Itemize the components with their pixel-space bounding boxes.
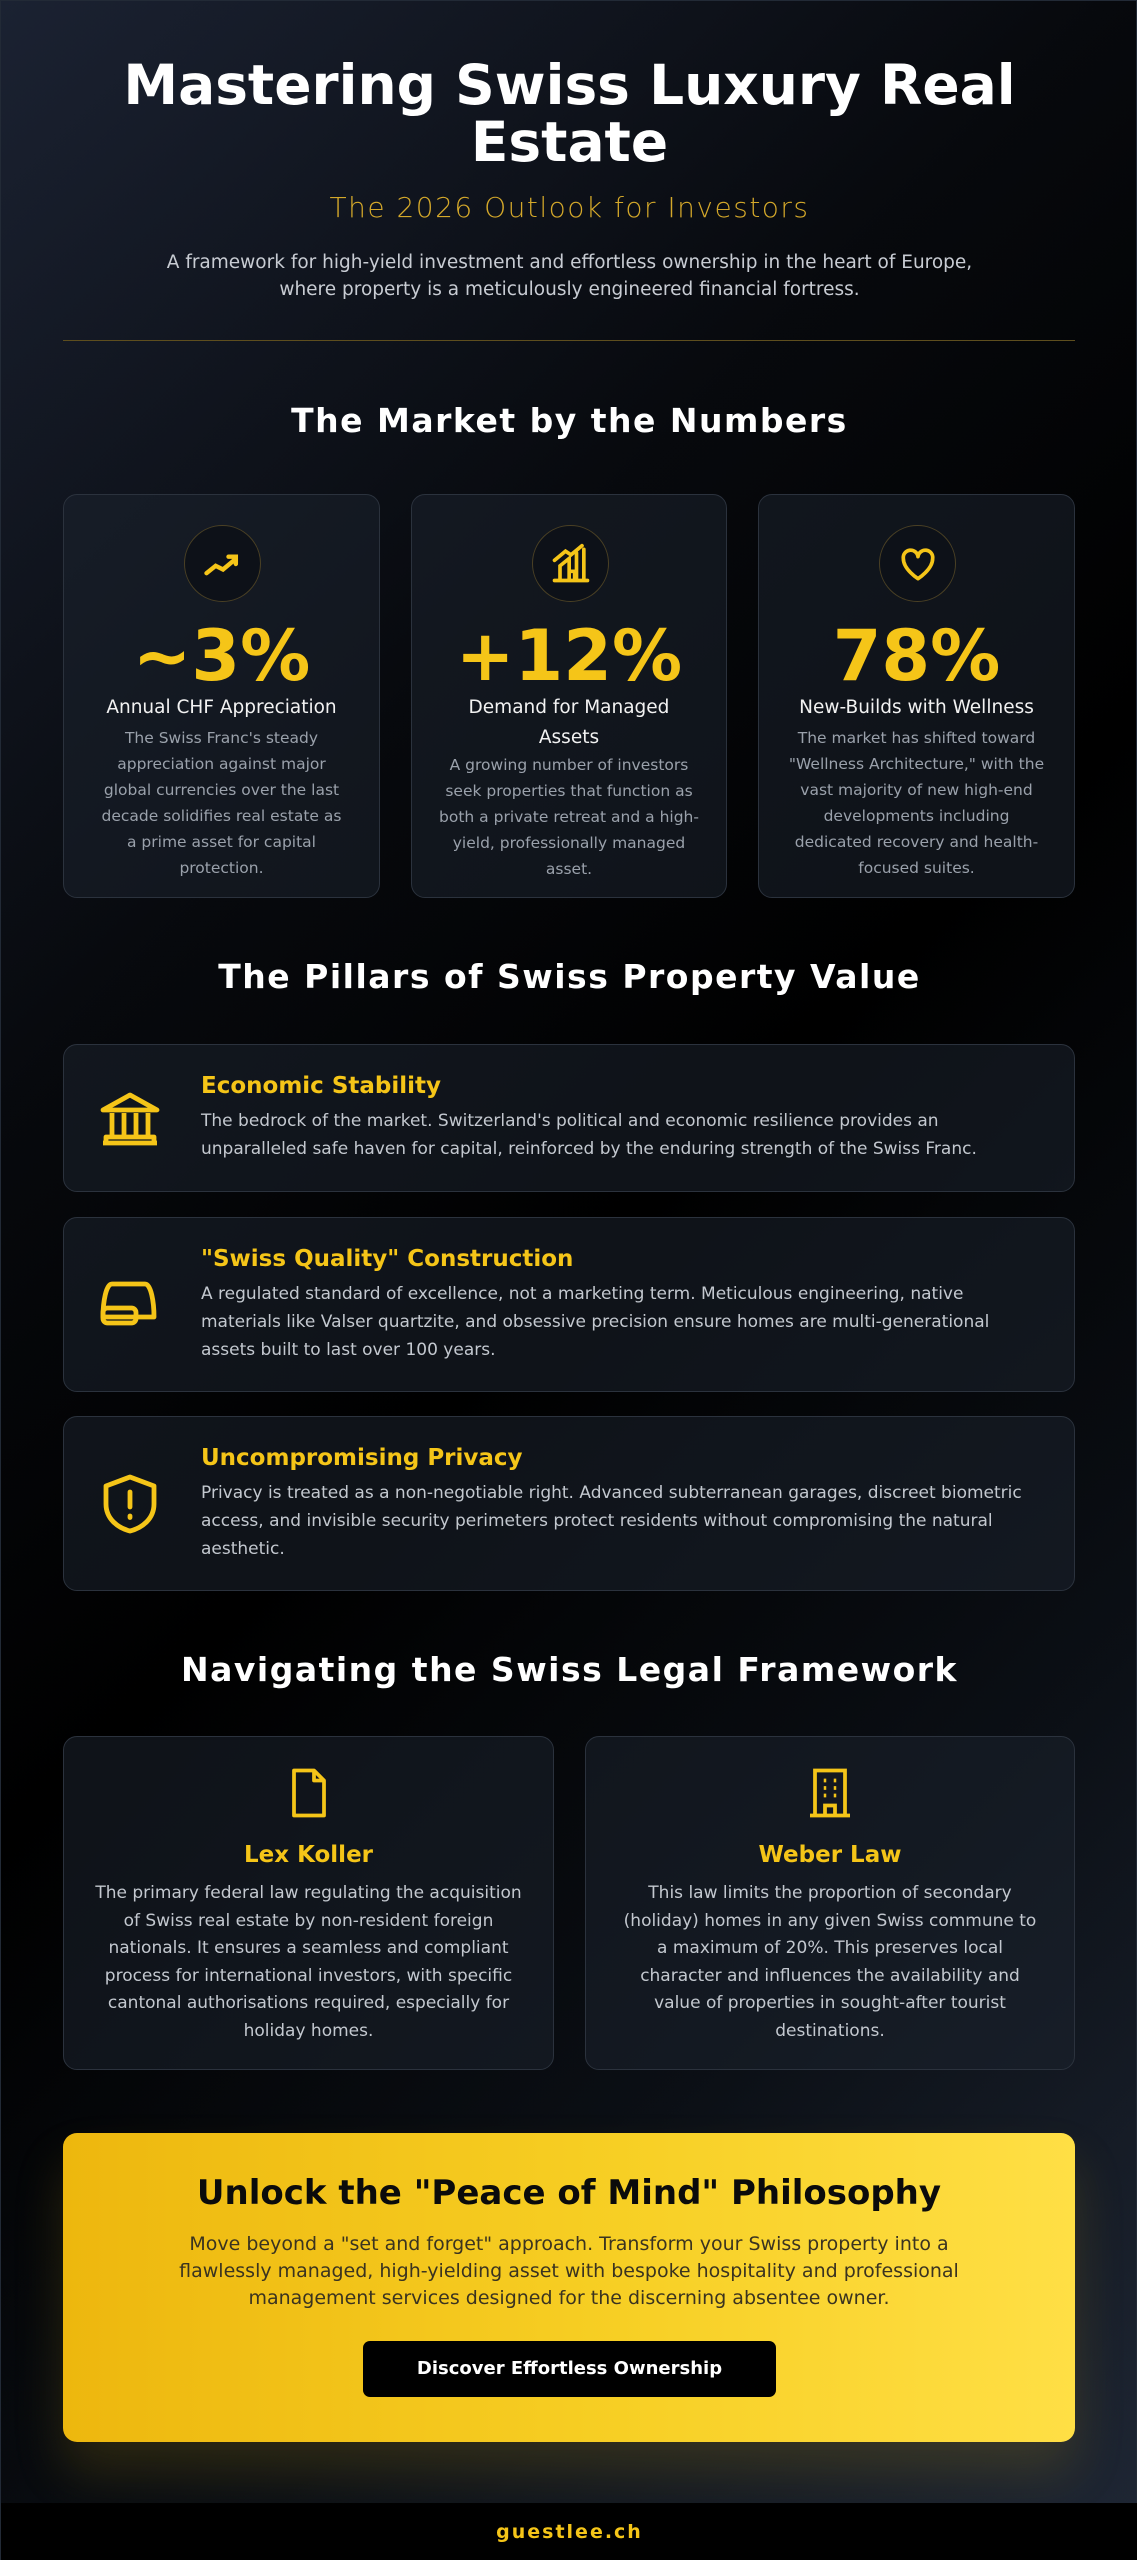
stat card: CHF appreciation: Annual CHF Appreciation <box>106 697 337 718</box>
stat card: managed assets <box>411 494 727 898</box>
title: Mastering Swiss Luxury Real <box>123 53 1016 117</box>
intro text: A framework for high-yield investment and effortless ownership in the heart of Europe, <box>167 252 972 273</box>
stat card: managed assets: +12% <box>456 615 682 697</box>
title: Estate <box>471 110 668 174</box>
pillar: privacy: Uncompromising Privacy <box>201 1445 523 1471</box>
icon: construction <box>100 1282 156 1326</box>
pillar: privacy: Privacy is treated as a non-negotiable right. Advanced subterranean garages, discreet biometric access, and invisible security perimeters protect residents without compromising the natural aesthetic. <box>201 1483 1022 1559</box>
CTA button <box>363 2341 776 2397</box>
intro text <box>166 252 972 300</box>
stat card: CHF appreciation: ~3% <box>133 615 310 697</box>
stat card: CHF appreciation <box>63 494 380 898</box>
stat card: managed assets: Demand for Managed <box>469 697 669 718</box>
CTA heading: Unlock the "Peace of Mind" Philosophy <box>197 2173 941 2213</box>
icon: document <box>292 1768 326 1818</box>
legal card: Lex Koller: The primary federal law regulating the acquisition of Swiss real estate by non-resident foreign nationals. It ensures a seamless and compliant process for international investors, with specific cantonal authorisations required, especially for holiday homes. <box>95 1883 522 2040</box>
subtitle: The 2026 Outlook for Investors <box>329 191 810 224</box>
icon: house chart <box>532 525 609 602</box>
stat card: wellness: The market has shifted toward "Wellness Architecture," with the vast majority of new high-end developments including dedicated recovery and health-focused suites. <box>789 729 1044 877</box>
pillar: swiss quality construction <box>63 1217 1075 1392</box>
CTA panel <box>63 2133 1075 2442</box>
CTA button: Discover Effortless Ownership <box>417 2358 722 2379</box>
heading: legal framework: Navigating the Swiss Legal Framework <box>181 1650 958 1689</box>
stat card: wellness: 78% <box>833 615 1000 697</box>
CTA text: Move beyond a "set and forget" approach. Transform your Swiss property into a flawlessly managed, high-yielding asset with bespoke hospitality and professional management services designed for the discerning absentee owner. <box>179 2233 959 2309</box>
footer <box>1 2503 1137 2560</box>
icon: shield <box>104 1474 156 1534</box>
stat card: managed assets: Assets <box>539 727 599 748</box>
icon: bank <box>100 1092 160 1146</box>
legal card: Lex Koller <box>63 1736 554 2070</box>
pillar: swiss quality construction: A regulated standard of excellence, not a marketing term. Meticulous engineering, native materials like Valser quartzite, and obsessive precision ensure homes are multi-generational assets built to last over 100 years. <box>201 1284 989 1360</box>
pillar: privacy <box>63 1416 1075 1591</box>
icon: building <box>810 1768 850 1818</box>
legal card: Weber Law <box>585 1736 1075 2070</box>
legal card: Weber Law: This law limits the proportion of secondary (holiday) homes in any given Swiss commune to a maximum of 20%. This preserves local character and influences the availability and value of properties in sought-after tourist destinations. <box>624 1883 1036 2040</box>
intro text: where property is a meticulously engineered financial fortress. <box>279 279 860 300</box>
pillar: economic stability: Economic Stability <box>201 1073 441 1099</box>
heading: market by the numbers: The Market by the Numbers <box>291 401 848 440</box>
icon: trend <box>184 525 261 602</box>
pillar: swiss quality construction: "Swiss Quality" Construction <box>201 1246 573 1272</box>
footer: guestlee.ch <box>496 2521 643 2543</box>
pillar: economic stability: The bedrock of the market. Switzerland's political and economic resilience provides an unparalleled safe haven for capital, reinforced by the enduring strength of the Swiss Franc. <box>201 1111 977 1159</box>
heading: pillars: The Pillars of Swiss Property Value <box>218 957 921 996</box>
legal card: Lex Koller: Lex Koller <box>244 1842 373 1868</box>
stat card: wellness <box>758 494 1075 898</box>
legal card: Weber Law: Weber Law <box>758 1842 902 1868</box>
pillar: economic stability <box>63 1044 1075 1192</box>
stat card: CHF appreciation: The Swiss Franc's steady appreciation against major global currencies over the last decade solidifies real estate as a prime asset for capital protection. <box>102 729 341 877</box>
icon: heart <box>879 525 956 602</box>
stat card: wellness: New-Builds with Wellness <box>799 697 1034 718</box>
title <box>123 53 1016 174</box>
stat card: managed assets: A growing number of investors seek properties that function as both a private retreat and a high-yield, professionally managed asset. <box>439 756 699 878</box>
